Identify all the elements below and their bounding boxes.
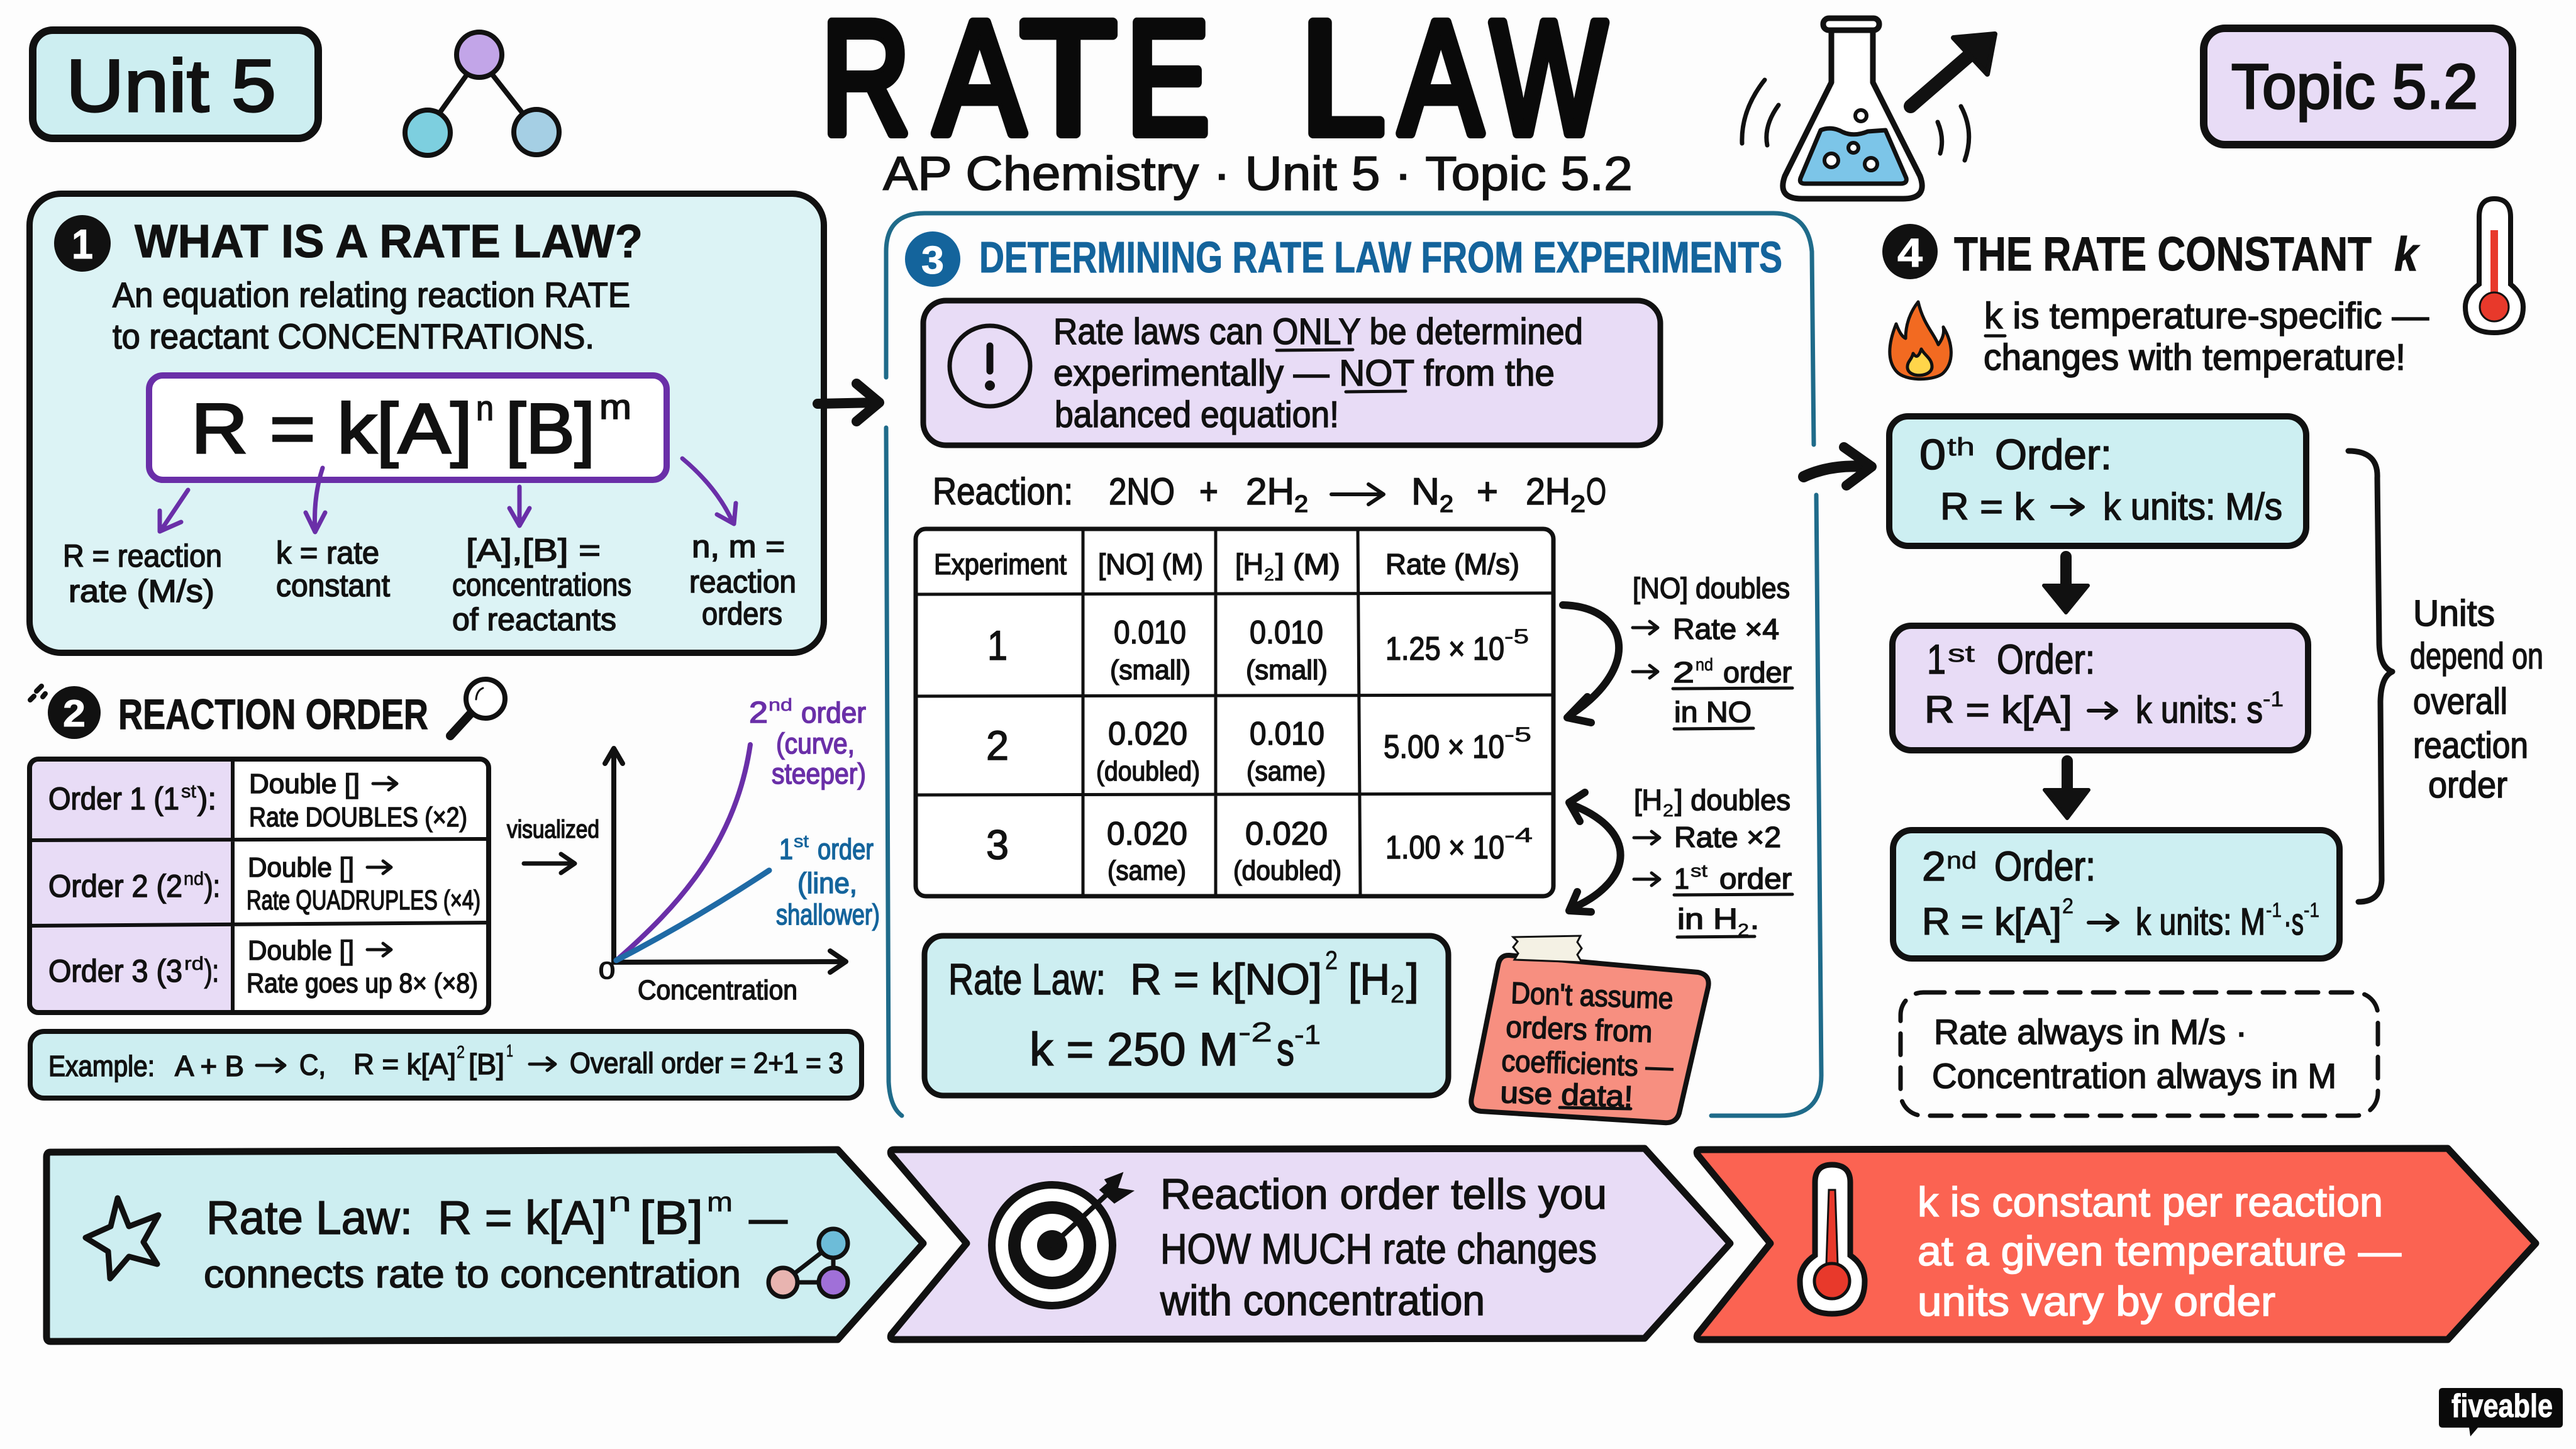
table: order effects: rd: [184, 953, 204, 974]
box: 1st order: Order:: [1997, 636, 2095, 682]
definition text: to reactant CONCENTRATIONS.: [113, 316, 594, 356]
note: NO doubles: [1633, 572, 1792, 729]
table: experiment data: -5: [1504, 723, 1531, 746]
table: order effects: Double []: [248, 852, 354, 883]
arrow: 0th to 1st: [2044, 557, 2088, 613]
note: H2 doubles: ] doubles: [1675, 784, 1790, 816]
banner text 3: at a given temperature —: [1918, 1228, 2401, 1274]
label: 2nd order: 2: [749, 696, 768, 730]
box: 0th order: th: [1947, 433, 1975, 461]
table: experiment data: 0.010: [1250, 716, 1324, 752]
badge: Topic 5.2: Topic 5.2: [2231, 52, 2478, 122]
box: 2nd order: 2: [2062, 894, 2074, 918]
table: experiment data: 0.020: [1245, 816, 1328, 852]
dashed note: [1901, 992, 2378, 1116]
note: H2 doubles: [1634, 784, 1792, 940]
table: order effects: Order 2 (2: [48, 869, 182, 904]
brace label: Units: [2413, 593, 2495, 634]
number badge 4: 4: [1897, 230, 1923, 275]
term labels: rate (M/s): [69, 574, 214, 609]
sticky note: use data: use data!: [1500, 1076, 1633, 1114]
icon: molecule tree: [405, 32, 559, 155]
box: 0th order: [1889, 416, 2306, 546]
sticky note: use data: coefficients —: [1501, 1045, 1674, 1084]
heading 4: k: [2394, 228, 2420, 281]
visualized arrow: [507, 816, 599, 873]
section: reaction order: [30, 679, 880, 1098]
table: experiment data: 3: [986, 821, 1009, 868]
term labels: [63, 529, 796, 637]
table: experiment data: -5: [1504, 625, 1529, 648]
box: determined rate law: k = 250 M: [1030, 1023, 1238, 1075]
table: order effects: ):: [197, 781, 216, 816]
heading 3: DETERMINING RATE LAW FROM EXPERIMENTS: [979, 233, 1782, 282]
box: determined rate law: 2: [1391, 980, 1404, 1008]
brace label: order: [2428, 765, 2507, 806]
text: k temperature: [1984, 296, 2429, 378]
box: 2nd order: -1: [2266, 899, 2282, 921]
box: 2nd order: k units: M: [2136, 901, 2265, 943]
table: order effects: Rate goes up 8× (×8): [247, 968, 478, 999]
table: experiment data: [NO] (M): [1098, 548, 1203, 580]
arrow: NO doubling: [1563, 605, 1619, 723]
table: order effects: Double []: [249, 769, 360, 799]
sticky note: use data: orders from: [1506, 1011, 1653, 1049]
term labels: reaction: [689, 564, 796, 599]
rate law formula box: m: [599, 387, 631, 426]
heading 1: WHAT IS A RATE LAW?: [135, 215, 643, 267]
box: 0th order: Order:: [1995, 431, 2112, 479]
example box: [30, 1031, 862, 1098]
box: 0th order: k units: M/s: [2103, 486, 2282, 528]
table: order effects: Rate DOUBLES (×2): [249, 802, 467, 833]
number badge 2: [48, 686, 101, 739]
label: 1st order: order: [818, 833, 874, 865]
rate law formula box: n: [476, 388, 494, 428]
banner text 2: [1160, 1170, 1607, 1324]
logo: fiveable: fiveable: [2451, 1388, 2553, 1424]
arrow: 1st to 2nd: [2045, 761, 2089, 818]
number badge 3: [905, 231, 960, 287]
icon: magnifier: [450, 679, 505, 736]
box: 2nd order: [1893, 830, 2340, 958]
example box: C,: [299, 1048, 326, 1081]
banner text 3: [1918, 1179, 2401, 1324]
banner text 1: R = k[A]: [438, 1191, 606, 1244]
heading 4: THE RATE CONSTANT: [1954, 228, 2372, 281]
note: NO doubles: nd: [1696, 655, 1713, 674]
label: 1st order: [776, 831, 880, 931]
box: 1st order: 1: [1927, 636, 1946, 682]
sticky note: use data: Don't assume: [1511, 977, 1674, 1016]
dashed note: Concentration always in M: [1932, 1056, 2336, 1096]
term labels: constant: [276, 568, 390, 603]
banner text 1: Rate Law:: [206, 1191, 413, 1244]
banner text 1: [204, 1187, 787, 1296]
term labels: of reactants: [452, 602, 616, 637]
icon: flask with rising arrow: [1742, 18, 1995, 199]
note: H2 doubles: 1: [1674, 862, 1689, 895]
label: 1st order: shallower): [776, 898, 880, 931]
sticky note: use data: [1471, 936, 1709, 1123]
callout: experimental only: balanced equation!: [1055, 394, 1339, 435]
example box: R = k[A]: [353, 1048, 456, 1080]
banner text 2: HOW MUCH rate changes: [1160, 1225, 1597, 1273]
note: H2 doubles: 2: [1663, 801, 1674, 820]
box: 1st order: k units: s: [2136, 689, 2263, 731]
banner: rate law summary: [47, 1150, 923, 1341]
note: NO doubles: order: [1723, 656, 1792, 689]
example box: [B]: [469, 1048, 504, 1080]
chart: rate vs concentration: 0: [599, 958, 615, 984]
table: experiment data: 5.00 × 10: [1384, 729, 1504, 765]
table: experiment data: 2: [1264, 565, 1274, 584]
table: experiment data: Experiment: [934, 548, 1067, 580]
chart: rate vs concentration: Concentration: [638, 975, 797, 1006]
chart: rate vs concentration: [599, 695, 880, 1006]
note: NO doubles: Rate ×4: [1673, 613, 1779, 645]
table: experiment data: (doubled): [1233, 855, 1341, 886]
label: 2nd order: nd: [769, 695, 792, 714]
table: experiment data: (doubled): [1096, 756, 1200, 787]
term labels: concentrations: [452, 567, 631, 602]
box: determined rate law: -1: [1294, 1019, 1321, 1050]
reaction equation: O: [1586, 470, 1606, 513]
banner: reaction order summary: [891, 1148, 1730, 1340]
text: k temperature: k is temperature-specific —: [1984, 296, 2429, 336]
reaction equation: 2H: [1526, 470, 1570, 513]
icon: flame: [1890, 302, 1951, 379]
icon: exclamation: [950, 326, 1030, 406]
arrow: panel 3 to panel 4: [1804, 447, 1872, 486]
table: experiment data: Rate (M/s): [1385, 548, 1519, 580]
note: H2 doubles: 2: [1738, 920, 1749, 940]
table: order effects: ):: [204, 953, 219, 989]
term labels: orders: [702, 596, 782, 631]
definition text: [113, 275, 630, 356]
brace: [2348, 451, 2392, 902]
reaction equation: 2: [1294, 491, 1308, 518]
note: NO doubles: in NO: [1674, 696, 1752, 728]
reaction equation: N: [1411, 470, 1440, 513]
dashed note: Rate always in M/s ·: [1934, 1012, 2247, 1052]
purple arrows to terms: [160, 458, 736, 532]
brace label: [2410, 593, 2543, 806]
icon: thermometer: [2465, 199, 2523, 333]
text: k temperature: changes with temperature!: [1984, 337, 2406, 378]
box: 2nd order: ·s: [2284, 901, 2304, 943]
heading 2: REACTION ORDER: [118, 691, 428, 738]
panel: determining rate law from experiments: [886, 213, 1821, 1123]
label: 1st order: (line,: [797, 867, 857, 899]
note: H2 doubles: in H: [1677, 902, 1738, 935]
example box: 2: [457, 1042, 465, 1062]
reaction equation: +: [1199, 470, 1218, 513]
table: experiment data: 1.25 × 10: [1385, 631, 1504, 667]
table: order effects: Order 3 (3: [48, 953, 182, 989]
table: order effects: nd: [184, 869, 204, 889]
subtitle: AP Chemistry · Unit 5 · Topic 5.2: [883, 147, 1633, 201]
callout: experimental only: experimentally — NOT from the: [1053, 353, 1555, 394]
banner text 3: k is constant per reaction: [1918, 1179, 2383, 1225]
table: order effects: ):: [204, 869, 220, 904]
example box: Example:: [48, 1050, 155, 1082]
table: experiment data: (same): [1246, 756, 1326, 787]
label: 1st order: st: [794, 831, 809, 851]
banner text 1: [B]: [640, 1191, 703, 1244]
term labels: k = rate: [276, 535, 379, 570]
box: determined rate law: R = k[NO]: [1130, 955, 1322, 1004]
note: H2 doubles: Rate ×2: [1674, 821, 1781, 853]
badge: Topic 5.2: [2204, 28, 2512, 145]
note: H2 doubles: .: [1750, 902, 1759, 935]
box: 0th order: 0: [1919, 431, 1946, 479]
box: 2nd order: nd: [1946, 848, 1977, 874]
table: experiment data: 0.010: [1114, 614, 1186, 651]
reaction equation: 2: [1440, 491, 1453, 518]
box: determined rate law: [924, 936, 1448, 1096]
banner text 3: units vary by order: [1918, 1278, 2275, 1324]
visualized arrow: visualized: [507, 816, 599, 843]
table: order effects: Order 1 (1: [48, 781, 179, 816]
term labels: R = reaction: [63, 538, 222, 574]
table: experiment data: [H: [1235, 548, 1263, 580]
box: 2nd order: 2: [1922, 843, 1946, 889]
table: experiment data: 1: [987, 622, 1008, 669]
example box: Overall order = 2+1 = 3: [570, 1046, 843, 1079]
label: 2nd order: [749, 695, 866, 790]
box: determined rate law: 2: [1325, 945, 1338, 975]
table: experiment data: (small): [1246, 655, 1328, 686]
table: experiment data: 0.020: [1107, 816, 1187, 852]
banner text 1: —: [749, 1191, 787, 1244]
table: experiment data: 2: [986, 722, 1009, 769]
box: determined rate law: Rate Law:: [948, 955, 1106, 1004]
number badge 1: [54, 215, 111, 272]
number badge 1: 1: [72, 221, 93, 267]
reaction equation: 2NO: [1109, 470, 1175, 513]
box: 2nd order: Order:: [1994, 843, 2096, 889]
label: 1st order: 1: [779, 833, 793, 865]
table: experiment data: 0.020: [1108, 716, 1187, 752]
table: order effects: Double []: [248, 935, 354, 966]
reaction equation: [933, 470, 1606, 518]
banner: k summary: [1697, 1148, 2536, 1340]
table: order effects: [30, 759, 489, 1013]
badge: Unit 5: Unit 5: [66, 45, 276, 128]
term labels: n, m =: [692, 529, 785, 564]
note: H2 doubles: [H: [1634, 784, 1662, 816]
table: experiment data: ] (M): [1275, 548, 1340, 580]
definition text: An equation relating reaction RATE: [113, 275, 630, 314]
callout: experimental only: [923, 301, 1660, 445]
example box: 1: [506, 1041, 513, 1060]
banner text 1: m: [707, 1187, 733, 1218]
rate law formula box: [149, 375, 667, 480]
label: 2nd order: steeper): [772, 757, 866, 790]
term labels: [A],[B] =: [466, 533, 601, 568]
logo: fiveable: [2439, 1388, 2563, 1436]
box: 1st order: [1892, 626, 2308, 750]
number badge 3: 3: [921, 239, 944, 282]
icon: star: [86, 1198, 158, 1279]
brace label: overall: [2413, 681, 2507, 722]
number badge 2: 2: [63, 692, 86, 735]
box: 2nd order: -1: [2304, 899, 2319, 921]
reaction equation: +: [1477, 470, 1498, 513]
reaction equation: 2H: [1246, 470, 1294, 513]
box: 1st order: R = k[A]: [1924, 689, 2072, 731]
table: experiment data: (small): [1110, 655, 1191, 686]
banner text 1: connects rate to concentration: [204, 1253, 741, 1296]
box: determined rate law: [H: [1348, 955, 1390, 1004]
box: determined rate law: s: [1277, 1023, 1294, 1075]
rate law formula box: R = k[A]: [191, 389, 472, 468]
section: the rate constant k: [1882, 199, 2543, 1116]
box: 0th order: R = k: [1940, 486, 2035, 528]
rate law formula box: [B]: [506, 389, 595, 468]
box: determined rate law: ]: [1406, 955, 1419, 1004]
table: experiment data: 1.00 × 10: [1385, 830, 1504, 866]
note: H2 doubles: st: [1690, 861, 1707, 880]
brace label: reaction: [2413, 725, 2528, 766]
banner text 1: n: [608, 1187, 631, 1218]
label: 2nd order: (curve,: [776, 727, 855, 760]
panel: what is a rate law: [30, 194, 824, 653]
icon: target with arrow: [992, 1174, 1132, 1306]
arrow: H2 doubling: [1569, 792, 1621, 912]
note: NO doubles: 2: [1673, 656, 1694, 689]
arrow: panel 1 to panel 3: [818, 384, 879, 421]
table: order effects: Rate QUADRUPLES (×4): [247, 885, 480, 916]
reaction equation: 2: [1570, 491, 1585, 518]
table: experiment data: (same): [1108, 855, 1186, 886]
table: experiment data: [916, 529, 1553, 896]
note: NO doubles: [NO] doubles: [1633, 572, 1790, 604]
icon: thermometer white: [1800, 1165, 1865, 1314]
table: experiment data: -4: [1504, 824, 1533, 847]
number badge 4: [1882, 224, 1938, 279]
box: determined rate law: -2: [1238, 1017, 1272, 1048]
badge: Unit 5: [33, 30, 318, 138]
banner text 2: Reaction order tells you: [1160, 1170, 1607, 1218]
table: order effects: st: [181, 781, 197, 802]
note: H2 doubles: order: [1719, 862, 1792, 895]
title: [821, 0, 1606, 168]
box: 1st order: -1: [2263, 687, 2284, 711]
box: 1st order: st: [1948, 641, 1975, 667]
sparks decoration: [30, 686, 45, 700]
example box: A + B: [175, 1050, 244, 1082]
box: 2nd order: R = k[A]: [1922, 901, 2062, 943]
reaction equation: Reaction:: [933, 470, 1073, 513]
table: experiment data: 0.010: [1250, 614, 1323, 651]
callout: experimental only: Rate laws can ONLY be determined: [1053, 311, 1583, 352]
banner text 2: with concentration: [1160, 1277, 1485, 1324]
icon: triangle molecule: [769, 1229, 848, 1297]
label: 2nd order: order: [801, 696, 866, 729]
